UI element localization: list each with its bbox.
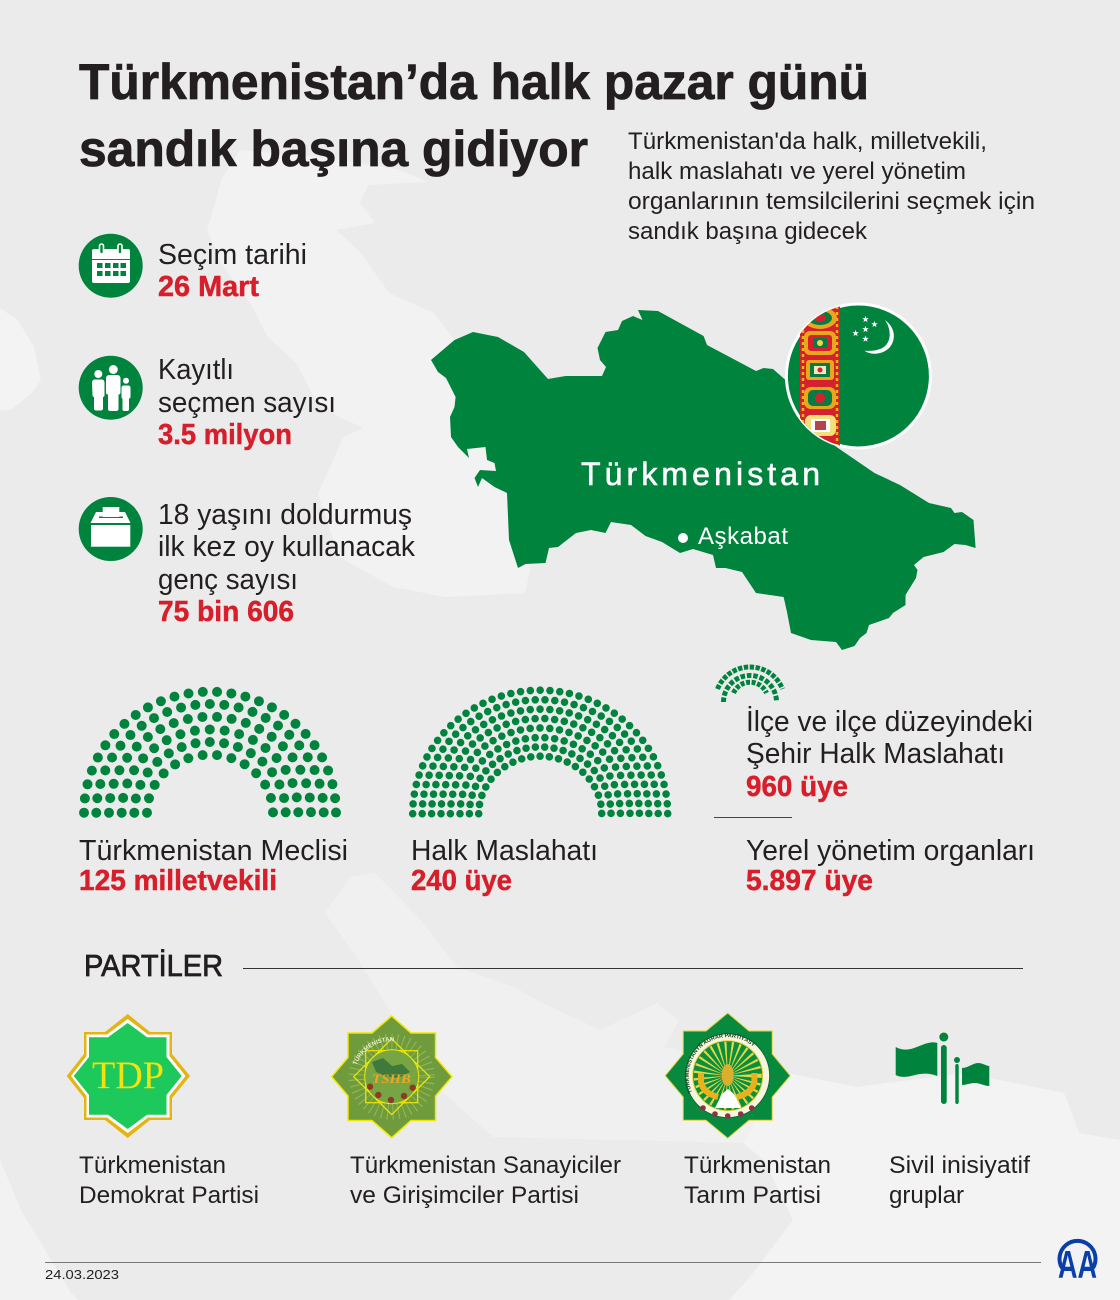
stat: election date: Seçim tarihi xyxy=(158,239,307,271)
party: Industrialists and Entrepreneurs emblem xyxy=(330,1015,453,1139)
stat: first-time voters: genç sayısı xyxy=(158,564,298,596)
seat label: parliament xyxy=(79,835,348,897)
stat: registered voters: 3.5 milyon xyxy=(158,419,292,451)
seat label: people's council xyxy=(411,835,598,897)
date: 24.03.2023 xyxy=(45,1267,119,1282)
stat: registered voters: Kayıtlı xyxy=(158,354,234,386)
party label: civil initiative groups: gruplar xyxy=(889,1182,964,1209)
section heading: parties: PARTİLER xyxy=(84,948,223,983)
carpet guls xyxy=(803,307,837,436)
seat label: parliament: 125 milletvekili xyxy=(79,865,277,897)
party label: Industrialists and Entrepreneurs: Türkmenistan Sanayiciler xyxy=(350,1152,621,1179)
party label: civil initiative groups: Sivil inisiyatif xyxy=(889,1152,1030,1179)
stat: first-time voters: 18 yaşını doldurmuş xyxy=(158,499,412,531)
seat label: district council: Şehir Halk Maslahatı xyxy=(746,738,1005,770)
title xyxy=(79,54,869,177)
crescent xyxy=(864,320,894,354)
seat label: local government: 5.897 üye xyxy=(746,865,873,897)
party: Industrialists and Entrepreneurs emblem: TÜRKMENISTAN xyxy=(352,1037,394,1064)
seat label: people's council: Halk Maslahatı xyxy=(411,835,598,867)
intro text: organlarının temsilcilerini seçmek için xyxy=(628,188,1035,215)
logo: Anadolu Agency xyxy=(1058,1241,1097,1287)
stat: registered voters: seçmen sayısı xyxy=(158,387,336,419)
title: Türkmenistan’da halk pazar günü xyxy=(79,54,869,110)
icon: ballot box xyxy=(79,497,143,561)
intro text: halk maslahatı ve yerel yönetim xyxy=(628,158,966,185)
stat: registered voters xyxy=(158,354,336,451)
seat label: district council: 960 üye xyxy=(746,771,848,803)
intro text: sandık başına gidecek xyxy=(628,218,868,245)
party label: Democratic Party: Türkmenistan xyxy=(79,1152,226,1179)
stat: election date xyxy=(158,239,307,303)
stat: election date: 26 Mart xyxy=(158,271,259,303)
party label: civil initiative groups xyxy=(889,1152,1030,1209)
logo: Anadolu Agency: AA xyxy=(1058,1244,1097,1287)
flag of Turkmenistan in circle xyxy=(786,300,930,455)
seat label: local government: Yerel yönetim organları xyxy=(746,835,1035,867)
party label: Industrialists and Entrepreneurs: ve Girişimciler Partisi xyxy=(350,1182,579,1209)
seat chart: people's council xyxy=(413,690,668,814)
seat label: people's council: 240 üye xyxy=(411,865,512,897)
icon: people xyxy=(79,356,143,420)
stat: first-time voters: ilk kez oy kullanacak xyxy=(158,531,415,563)
party label: Agrarian Party xyxy=(684,1152,831,1209)
icon: calendar xyxy=(79,234,143,298)
party: Agrarian Party emblem xyxy=(664,1012,791,1139)
icon: flags for civil initiative groups xyxy=(896,1032,989,1104)
intro text: Türkmenistan'da halk, milletvekili, xyxy=(628,128,987,155)
party: Industrialists and Entrepreneurs emblem: TSHB xyxy=(372,1071,411,1086)
map label: country: Türkmenistan xyxy=(581,456,824,492)
party label: Democratic Party: Demokrat Partisi xyxy=(79,1182,259,1209)
party: Democratic Party emblem: TDP xyxy=(92,1054,164,1097)
party label: Democratic Party xyxy=(79,1152,259,1209)
intro text xyxy=(628,128,1035,245)
party label: Industrialists and Entrepreneurs xyxy=(350,1152,621,1209)
stat: first-time voters xyxy=(158,499,415,628)
party label: Agrarian Party: Türkmenistan xyxy=(684,1152,831,1179)
seat label: parliament: Türkmenistan Meclisi xyxy=(79,835,348,867)
seat label: local government xyxy=(746,835,1035,897)
map marker: capital: Aşkabat xyxy=(698,523,788,550)
party: Agrarian Party emblem: TÜRKMENISTANYŇ AGRAR PARTIÝASY xyxy=(684,1033,756,1094)
party label: Agrarian Party: Tarım Partisi xyxy=(684,1182,821,1209)
stat: first-time voters: 75 bin 606 xyxy=(158,596,294,628)
stars xyxy=(852,316,878,342)
seat label: district council xyxy=(746,705,1033,803)
map: Turkmenistan xyxy=(431,310,976,650)
title: sandık başına gidiyor xyxy=(79,121,588,177)
seat chart: Turkmenistan parliament xyxy=(84,692,336,813)
party: Democratic Party emblem xyxy=(67,1014,190,1138)
seat label: district council: İlçe ve ilçe düzeyindeki xyxy=(746,705,1033,738)
seat chart: small district council xyxy=(718,667,782,702)
